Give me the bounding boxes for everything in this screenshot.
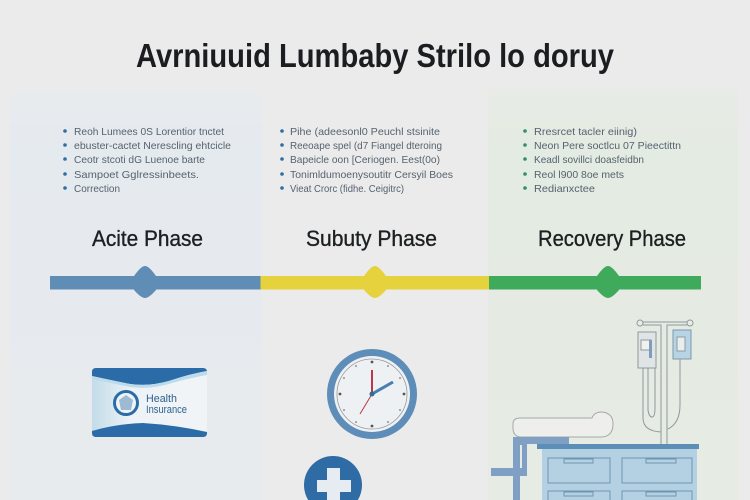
IV rail end right — [687, 320, 693, 326]
text block: recovery phase list: Neon Pere soctlcu 07 Pieectittn — [534, 140, 681, 152]
heading: acute phase: Acite Phase — [92, 226, 203, 251]
timeline bar — [50, 266, 701, 298]
text block: recovery phase list: Rresrcet tacler eiinig) — [534, 126, 637, 138]
marker: acute — [134, 266, 156, 298]
icon: health insurance card — [92, 368, 207, 437]
icon: wall clock — [327, 349, 417, 439]
text block: acute phase list: Sampoet Gglressinbeets. — [74, 169, 199, 181]
text block: acute phase list: Reoh Lumees 0S Lorentior tnctet — [74, 126, 224, 138]
heading: recovery phase: Recovery Phase — [538, 226, 686, 251]
text block: subacute phase list — [280, 126, 453, 195]
cabinet — [537, 444, 699, 500]
text block: subacute phase list: Tonimldumoenysoutitr Cersyil Boes — [290, 169, 453, 181]
marker: subacute — [364, 266, 386, 298]
text block: recovery phase list: Keadl sovillci doasfeidbn — [534, 154, 644, 166]
icon: medical cross — [304, 456, 362, 500]
text block: subacute phase list: Pihe (adeesonl0 Peuchl stsinite — [290, 126, 440, 138]
IV rail end left — [637, 320, 643, 326]
text block: recovery phase list: Redianxctee — [534, 183, 595, 195]
illustration: IV stand and exam table — [513, 320, 693, 444]
text block: acute phase list: Ceotr stcoti dG Luenoe barte — [74, 154, 205, 166]
marker: recovery — [597, 266, 619, 298]
IV monitor left — [638, 332, 656, 368]
title: Avrniuuid Lumbaby Strilo lo doruy — [136, 37, 615, 74]
text block: subacute phase list: Bapeicle oon [Ceriogen. Eest(0o) — [290, 154, 440, 166]
text block: subacute phase list: Vieat Crorc (fidhe. Ceigitrc) — [290, 183, 404, 195]
heading: subacute phase: Subuty Phase — [306, 226, 437, 251]
icon: health insurance card: Insurance — [146, 404, 187, 416]
text block: acute phase list: Correction — [74, 183, 120, 195]
panel: recovery background — [488, 88, 738, 500]
bed pillow — [513, 412, 613, 437]
tubing — [643, 359, 680, 432]
card label: Health — [146, 393, 177, 405]
text block: subacute phase list: Reeoape spel (d7 Fiangel dteroing — [290, 140, 442, 152]
IV pump right — [673, 330, 691, 359]
text block: recovery phase list: Reol l900 8oe mets — [534, 169, 624, 181]
table arm — [491, 437, 569, 500]
text block: acute phase list: ebuster-cactet Nerescling ehtcicle — [74, 140, 231, 152]
panel: acute background — [10, 88, 262, 500]
text block: recovery phase list — [523, 126, 681, 195]
text block: acute phase list — [63, 126, 231, 195]
IV pole — [643, 322, 688, 444]
